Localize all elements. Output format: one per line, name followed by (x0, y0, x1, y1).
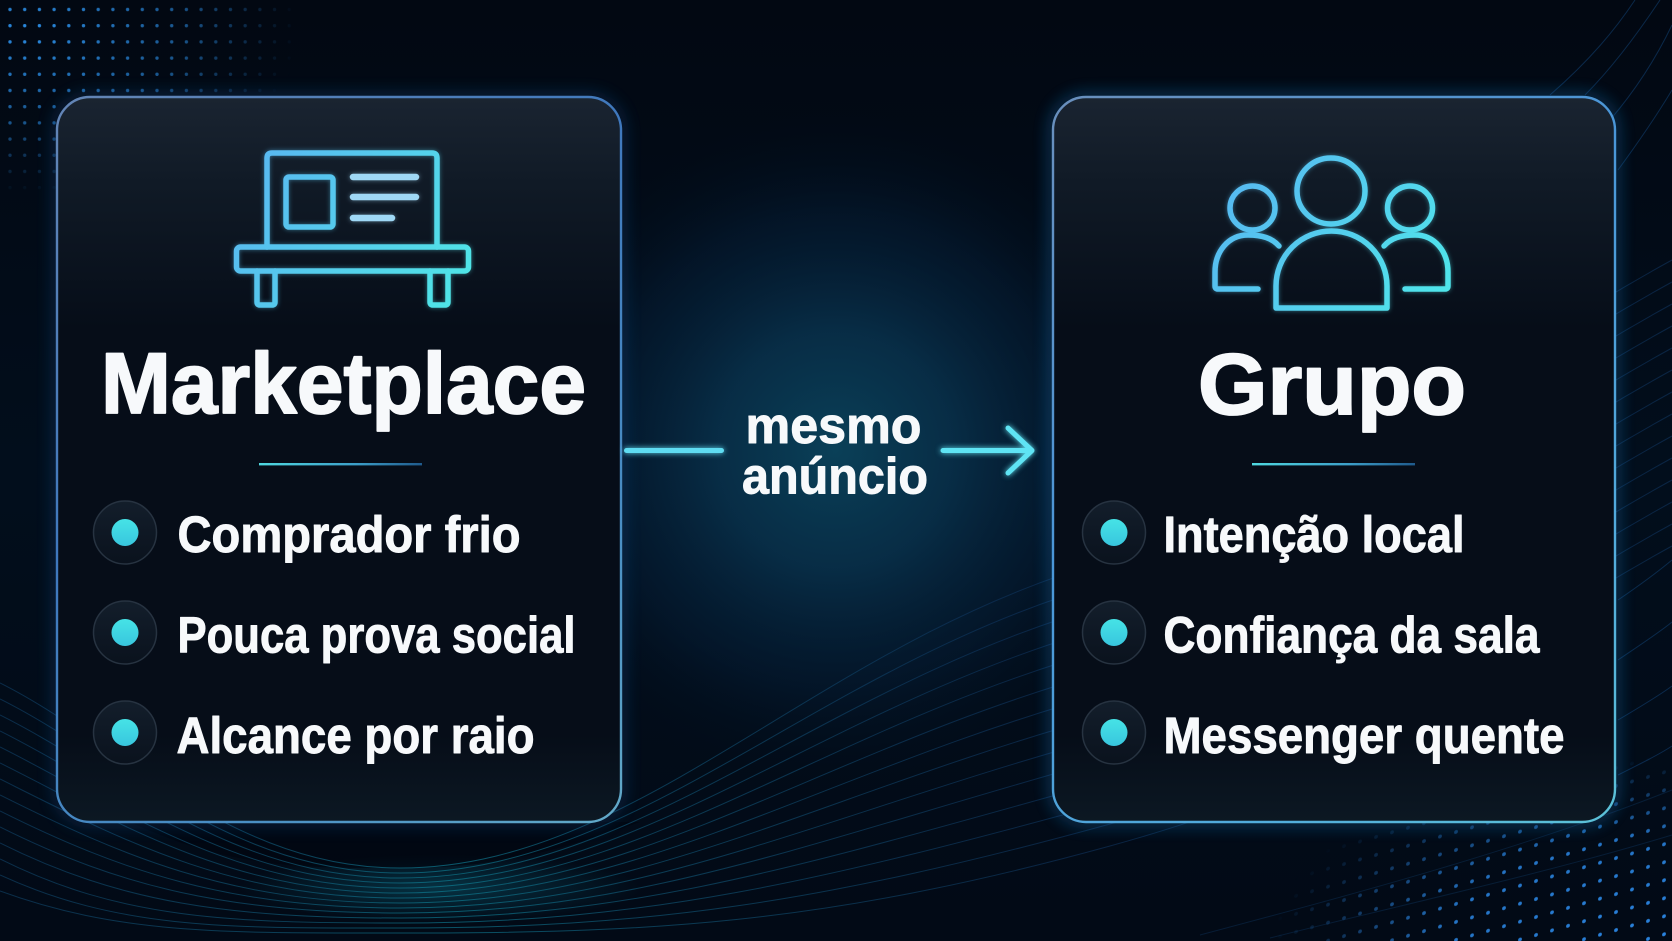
list item: Comprador frio: Comprador frio (178, 506, 520, 563)
panel: Marketplace (57, 97, 621, 822)
dot grid: bottom right (1280, 762, 1666, 941)
list item: Intenção local (1082, 501, 1464, 564)
list item: Intenção local: Intenção local (1164, 506, 1464, 563)
arrow: pointing to Grupo (943, 428, 1032, 473)
label: mesmo anúncio: mesmo (746, 397, 922, 454)
heading: Marketplace: Marketplace (101, 336, 586, 432)
list item: Messenger quente: Messenger quente (1164, 707, 1564, 764)
label: mesmo anúncio: anúncio (742, 448, 928, 504)
list item: Alcance por raio (94, 701, 534, 764)
diagonal lines: right side (1200, 0, 1672, 938)
icon: group of people (1215, 158, 1448, 308)
list item: Messenger quente (1082, 701, 1564, 764)
dot grid: top left (8, 8, 290, 189)
list item: Pouca prova social: Pouca prova social (178, 606, 576, 664)
divider (259, 463, 422, 465)
icon: marketplace stall (236, 153, 468, 305)
heading: Grupo: Grupo (1198, 337, 1466, 433)
flowing wave lines (0, 260, 1672, 933)
list item: Confiança da sala: Confiança da sala (1164, 606, 1540, 664)
connector: line leaving Marketplace (624, 448, 724, 453)
label: mesmo anúncio (742, 397, 928, 504)
panel: Grupo (1053, 97, 1615, 822)
list item: Confiança da sala (1082, 601, 1540, 664)
list item: Alcance por raio: Alcance por raio (176, 707, 534, 764)
list item: Comprador frio (94, 501, 520, 564)
list item: Pouca prova social (94, 601, 576, 664)
divider (1252, 463, 1415, 465)
